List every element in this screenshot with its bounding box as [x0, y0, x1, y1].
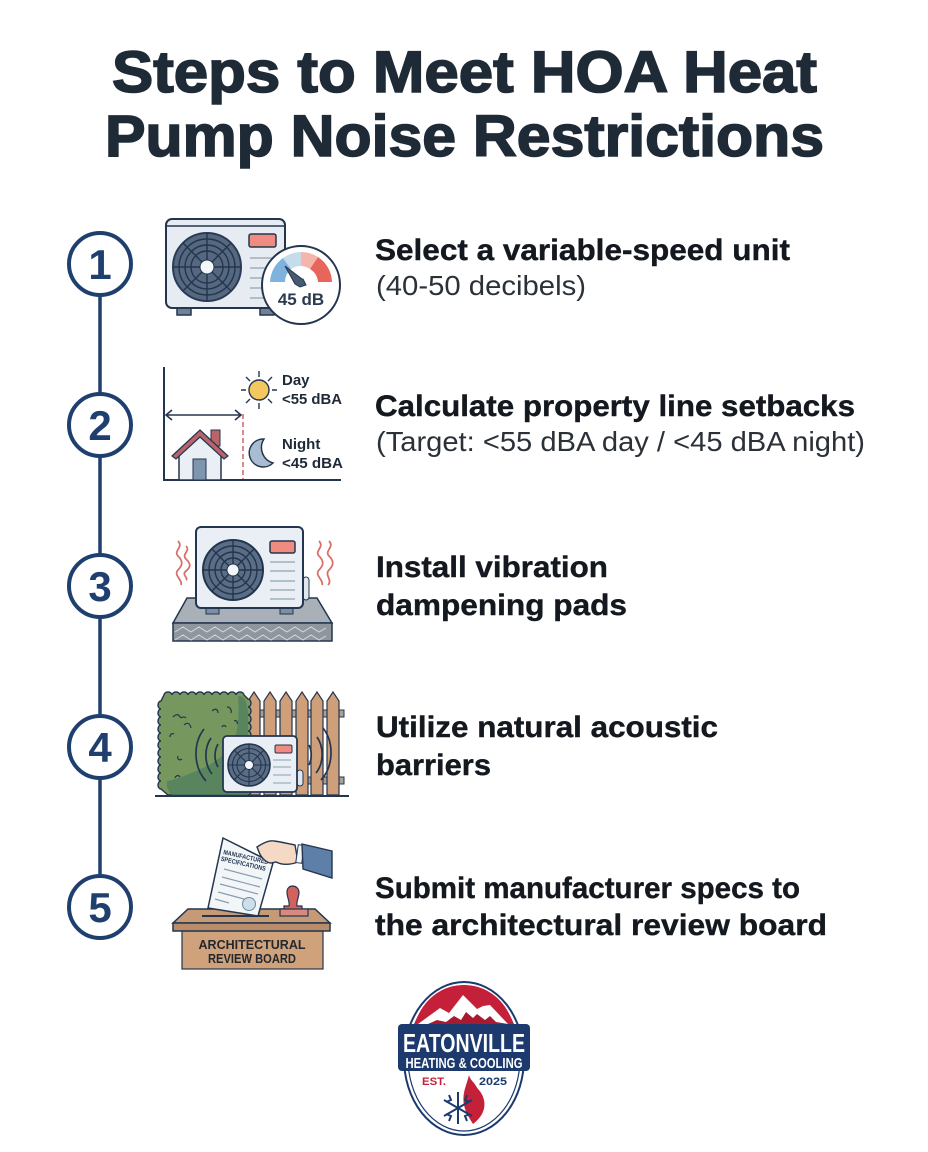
step number 3: 3: [88, 563, 112, 610]
step number 5: [69, 876, 131, 938]
text: step 4: [376, 711, 718, 782]
icon: unit on vibration pad: [173, 527, 333, 641]
step number 4: 4: [88, 724, 112, 771]
text: step 2: Calculate property line setbacks: [375, 390, 855, 423]
step number 4: [69, 716, 131, 778]
text: step 5: the architectural review board: [375, 909, 827, 942]
icon: property line setback: <45 dBA: [282, 455, 343, 472]
icon: submitting specs to review board: REVIEW BOARD: [208, 952, 296, 966]
icon: submitting specs to review board: [173, 838, 332, 969]
text: step 5: Submit manufacturer specs to: [375, 872, 800, 905]
step number 2: [69, 394, 131, 456]
step number 1: 1: [88, 241, 112, 288]
text: step 3: Install vibration: [376, 551, 608, 584]
text: step 1: (40-50 decibels): [376, 270, 586, 301]
title: Pump Noise Restrictions: [105, 104, 824, 169]
icon: natural acoustic barriers: [155, 692, 349, 796]
icon: heat pump with 45 dB gauge: [166, 219, 340, 324]
text: step 4: barriers: [376, 749, 491, 782]
logo: Eatonville Heating & Cooling: HEATING & COOLING: [406, 1055, 522, 1072]
text: step 3: dampening pads: [376, 589, 627, 622]
text: step 1: Select a variable-speed unit: [375, 234, 790, 267]
step number 1: [69, 233, 131, 295]
text: step 3: [376, 551, 627, 622]
text: step 2: [375, 390, 865, 457]
logo: Eatonville Heating & Cooling: [398, 982, 530, 1135]
logo: Eatonville Heating & Cooling: 2025: [479, 1076, 507, 1088]
text: step 5: [375, 872, 827, 942]
step number 5: 5: [88, 884, 112, 931]
icon: property line setback: <55 dBA: [282, 391, 342, 408]
icon: property line setback: Night: [282, 436, 320, 453]
icon: submitting specs to review board: SPECIFICATIONS: [220, 856, 267, 873]
icon: property line setback: Day: [282, 372, 310, 389]
text: step 1: [375, 234, 790, 301]
text: step 2: (Target: <55 dBA day / <45 dBA night): [376, 426, 865, 457]
step number 3: [69, 555, 131, 617]
title: [105, 40, 824, 169]
step number 2: 2: [88, 402, 112, 449]
logo: Eatonville Heating & Cooling: EATONVILLE: [403, 1028, 525, 1058]
title: Steps to Meet HOA Heat: [112, 40, 817, 105]
icon: submitting specs to review board: ARCHITECTURAL: [198, 938, 306, 952]
text: step 4: Utilize natural acoustic: [376, 711, 718, 744]
icon: heat pump with 45 dB gauge: 45 dB: [278, 290, 324, 309]
icon: submitting specs to review board: MANUFACTURED: [223, 849, 269, 866]
step timeline: [69, 233, 131, 938]
icon: property line setback: [164, 367, 343, 480]
logo: Eatonville Heating & Cooling: EST.: [422, 1076, 446, 1088]
